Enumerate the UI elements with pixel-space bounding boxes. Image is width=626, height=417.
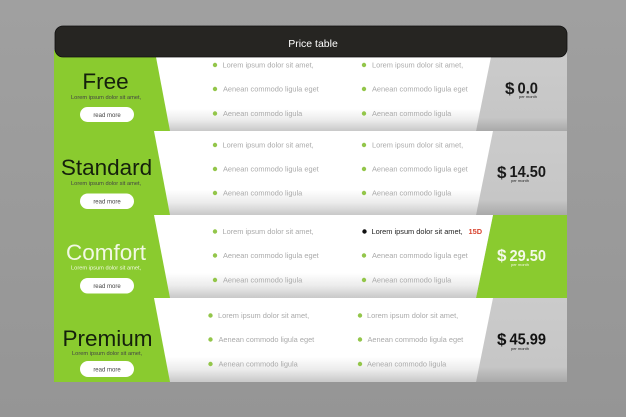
plan subtitle: Premium: Lorem ipsum dolor sit amet, — [72, 351, 143, 357]
plan subtitle: Free: Lorem ipsum dolor sit amet, — [71, 95, 142, 101]
feature list: Comfort: Lorem ipsum dolor sit amet, — [222, 227, 314, 236]
feature list: Free: Aenean commodo ligula — [372, 109, 452, 118]
button: Standard read more: read more — [93, 200, 121, 206]
feature list: Premium: Aenean commodo ligula — [367, 360, 447, 368]
features panel: Comfort — [154, 215, 493, 298]
feature list: Standard: Aenean commodo ligula eget — [372, 164, 468, 174]
feature list: Standard: Aenean commodo ligula — [372, 188, 452, 198]
plan subtitle: Standard: Lorem ipsum dolor sit amet, — [71, 181, 142, 187]
price: Free: per month — [519, 94, 537, 99]
price: Premium — [497, 330, 546, 351]
badge: 15D: 15D — [468, 227, 483, 236]
feature list: Comfort: Aenean commodo ligula — [372, 276, 452, 284]
button: Premium read more — [80, 361, 134, 377]
panel: grey right column — [470, 50, 567, 382]
plan name: Free: Free — [82, 69, 129, 94]
features panel: Premium — [154, 298, 493, 382]
plan subtitle: Comfort: Lorem ipsum dolor sit amet, — [71, 266, 142, 272]
panel: Standard plan — [61, 131, 567, 215]
plan name: Premium: Premium — [62, 326, 153, 351]
header bar: Price table — [55, 26, 567, 57]
feature list: Premium: Aenean commodo ligula eget — [368, 335, 463, 344]
feature list: Free: Aenean commodo ligula eget — [372, 84, 468, 94]
plan name: Standard: Standard — [61, 155, 152, 180]
feature list: Comfort: Aenean commodo ligula eget — [372, 251, 468, 260]
price: Comfort: per month — [511, 262, 529, 267]
price background: Premium — [476, 298, 567, 382]
features panel: Free — [156, 57, 491, 131]
panel: green left column — [54, 50, 174, 382]
panel: Comfort plan — [66, 215, 567, 298]
feature list: Free — [213, 60, 468, 118]
feature list: Premium: Aenean commodo ligula — [218, 360, 299, 368]
feature list: Premium: Lorem ipsum dolor sit amet, — [367, 311, 458, 320]
feature list: Comfort — [213, 227, 483, 284]
price: Premium: 45.99 — [510, 332, 546, 348]
feature list: Comfort: Aenean commodo ligula eget — [223, 251, 319, 260]
feature list: Free: Aenean commodo ligula — [223, 109, 303, 118]
panel: Premium plan — [62, 298, 567, 382]
button: Premium read more: read more — [93, 368, 121, 374]
price: Comfort — [497, 246, 546, 267]
button: Comfort read more — [80, 278, 134, 294]
feature list: Comfort: Aenean commodo ligula — [223, 276, 303, 284]
price background: Free — [476, 57, 567, 131]
button: Free read more: read more — [93, 113, 121, 119]
feature list: Free: Lorem ipsum dolor sit amet, — [372, 60, 463, 70]
feature list: Standard: Lorem ipsum dolor sit amet, — [372, 140, 463, 150]
price: Comfort: 29.50 — [510, 248, 546, 265]
button: Free read more — [80, 107, 134, 122]
button: Standard read more — [80, 194, 134, 209]
price: Free — [505, 79, 538, 99]
title: Price table — [288, 38, 338, 50]
price: Standard: per month — [511, 178, 529, 183]
price: Premium: per month — [511, 346, 529, 351]
feature list: Standard: Aenean commodo ligula — [223, 188, 303, 198]
feature list: Standard: Lorem ipsum dolor sit amet, — [222, 140, 314, 150]
price: Standard: $ — [497, 163, 507, 182]
price: Comfort: $ — [497, 246, 507, 265]
feature list: Free: Lorem ipsum dolor sit amet, — [222, 60, 314, 70]
price: Free: $ — [505, 79, 515, 98]
panel: Free plan — [71, 57, 567, 131]
feature list: Premium: Aenean commodo ligula eget — [218, 335, 314, 344]
features panel: Standard — [154, 131, 493, 215]
feature list: Standard: Aenean commodo ligula eget — [223, 164, 319, 174]
price: Standard: 14.50 — [510, 164, 546, 181]
feature list: Premium — [208, 311, 463, 368]
price: Standard — [497, 163, 546, 183]
feature list: Comfort: Lorem ipsum dolor sit amet, — [372, 227, 463, 236]
price background: Standard — [476, 131, 567, 215]
feature list: Standard — [213, 140, 468, 198]
price: Free: 0.0 — [518, 80, 538, 98]
feature list: Free: Aenean commodo ligula eget — [223, 84, 319, 94]
price: Premium: $ — [497, 330, 507, 349]
feature list: Premium: Lorem ipsum dolor sit amet, — [218, 311, 309, 320]
button: Comfort read more: read more — [93, 284, 121, 290]
price background: Comfort — [476, 215, 567, 298]
plan name: Comfort: Comfort — [66, 240, 147, 265]
